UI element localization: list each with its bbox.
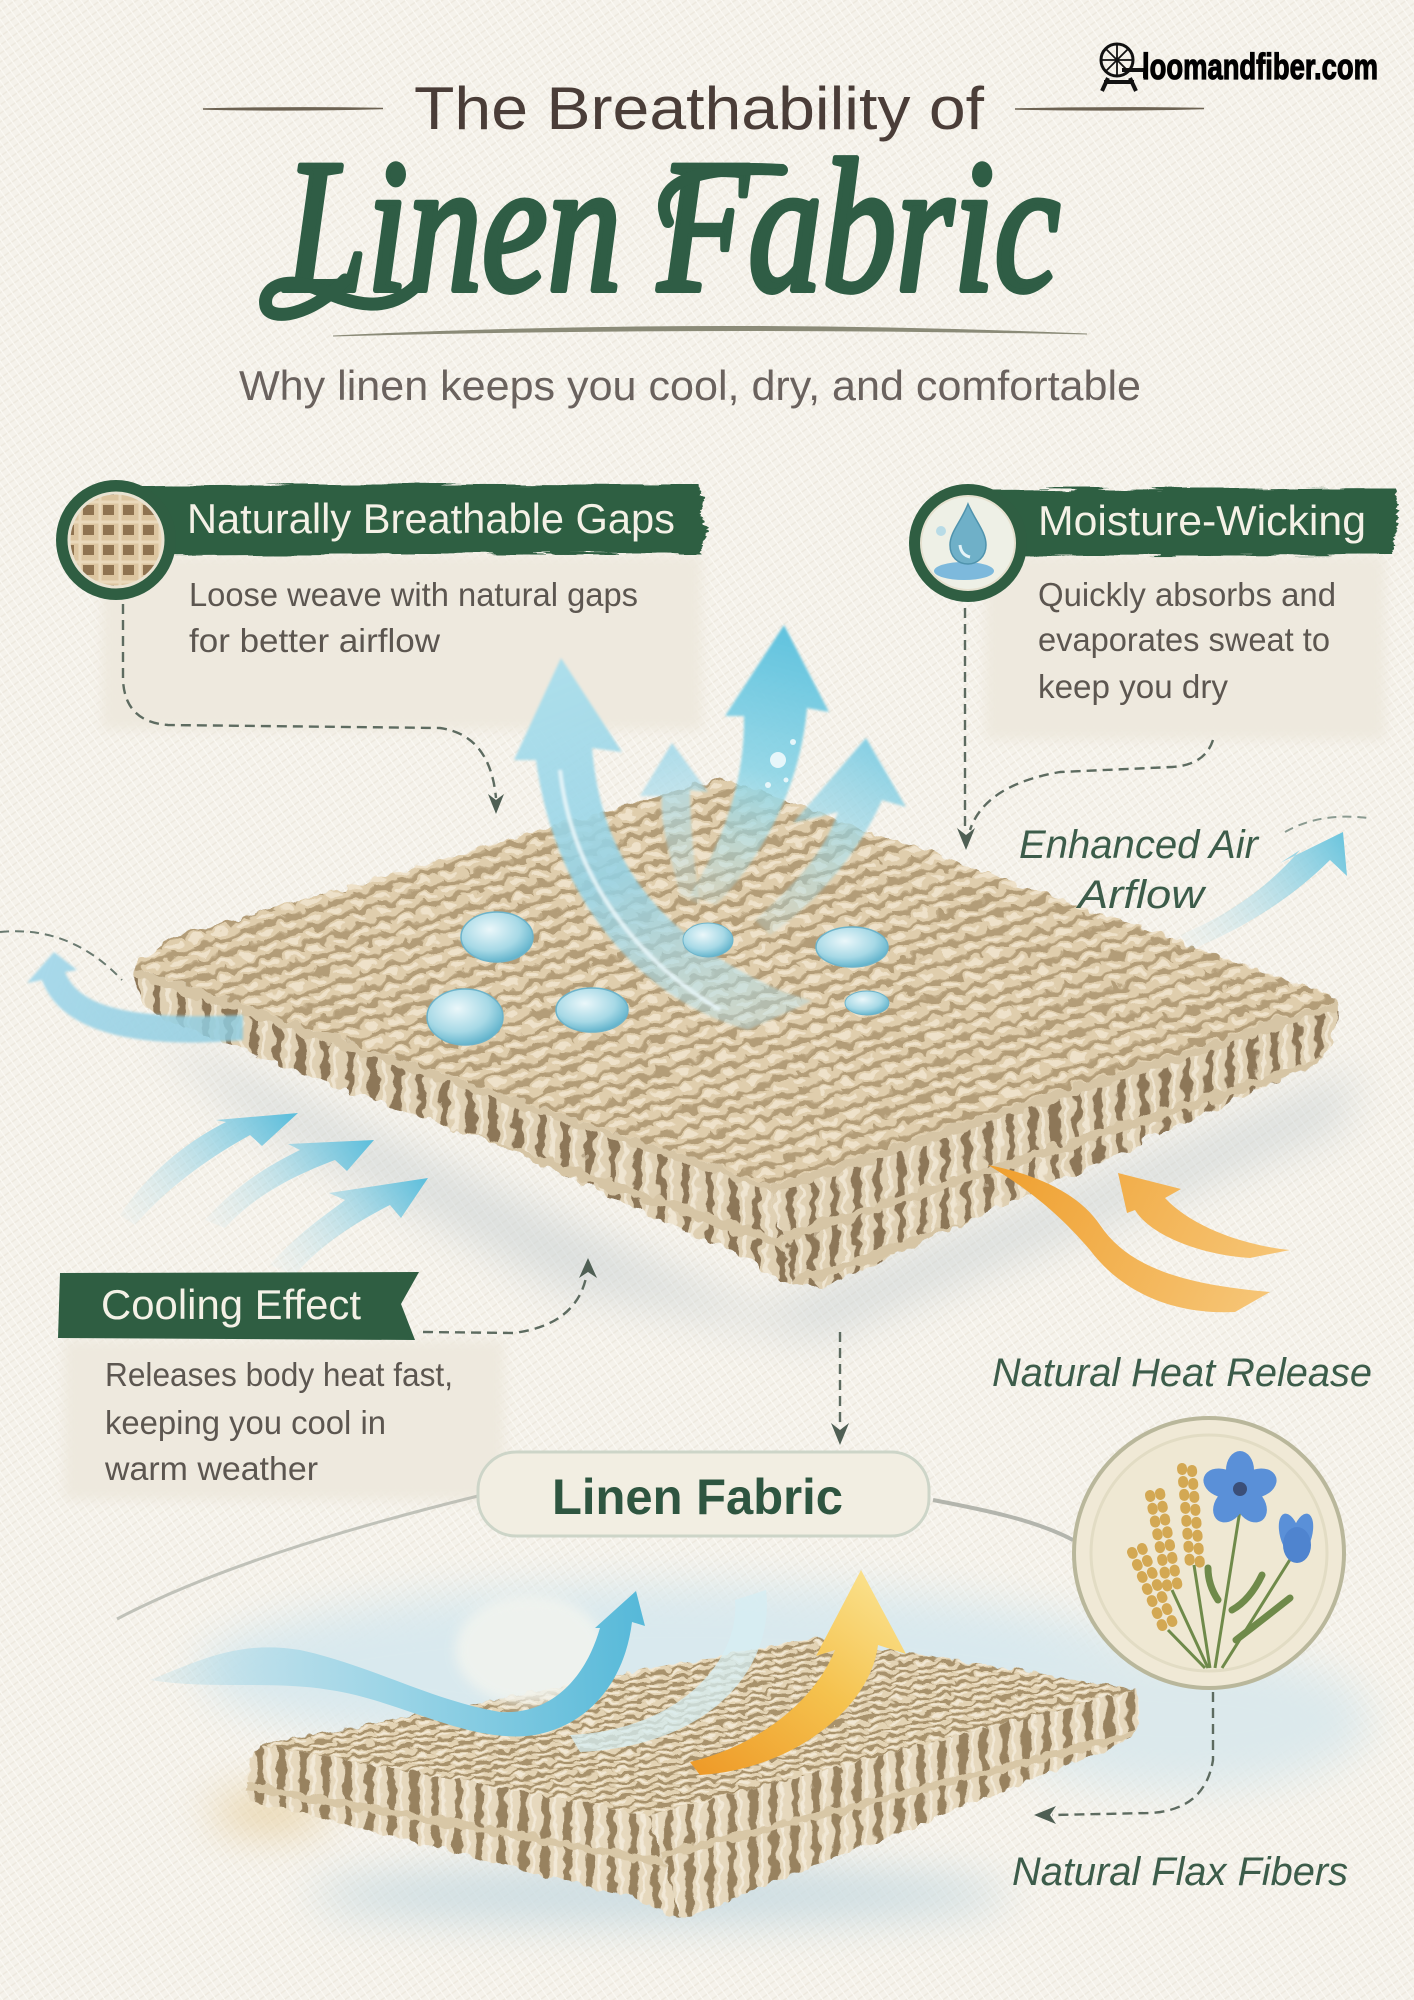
label: natural heat release: Natural Heat Release (992, 1351, 1372, 1395)
icon: water drop (909, 484, 1027, 602)
dashed flow line: left curl (0, 931, 122, 980)
panel: cooling effect: keeping you cool in (105, 1404, 386, 1441)
pill: linen fabric (478, 1452, 929, 1536)
airflow arrow: small rear (640, 743, 708, 905)
stems and leaves (1168, 1510, 1296, 1668)
airflow arrow: large curved (514, 658, 812, 1030)
airflow arrow: right exit (1180, 832, 1347, 950)
heading: Cooling Effect (101, 1281, 361, 1328)
lower linen swatch (246, 1638, 1140, 1917)
panel: moisture-wicking: keep you dry (1038, 668, 1228, 705)
panel: moisture-wicking: evaporates sweat to (1038, 621, 1330, 658)
logo: loomandfiber.com (1101, 44, 1378, 91)
panel backing (102, 555, 702, 730)
main linen swatch (133, 778, 1338, 1287)
title: Linen Fabric script: Linen Fabric (283, 122, 1060, 332)
description: Loose weave with natural gaps (189, 576, 638, 613)
top woven surface (135, 778, 1338, 1185)
subtitle: Why linen keeps you cool, dry, and comfortable (239, 362, 1141, 409)
fabric shadow (150, 1030, 1360, 1340)
panel: naturally breathable gaps: for better airflow (189, 622, 440, 659)
flax flowers (1200, 1451, 1317, 1563)
lower yellow heat arrow (690, 1570, 906, 1775)
dashed connector: fabric to linen fabric pill (831, 1332, 849, 1445)
heading: Naturally Breathable Gaps (187, 495, 675, 542)
left side face (133, 968, 792, 1282)
header banner (120, 484, 708, 556)
pill: linen fabric: Linen Fabric (552, 1469, 843, 1525)
label: enhanced air airflow (1019, 817, 1368, 917)
panel backing (64, 1340, 504, 1500)
header banner (975, 488, 1398, 556)
heat arrows: orange (988, 1165, 1290, 1312)
panel: moisture-wicking (909, 484, 1398, 740)
mist cloud over lower swatch (455, 1595, 605, 1705)
cooling arrows: lower left (120, 1113, 428, 1275)
panel: naturally breathable gaps (56, 480, 708, 730)
dashed connector: cooling effect to fabric (423, 1258, 597, 1333)
label: natural flax fibers: Natural Flax Fibers (1012, 1850, 1348, 1894)
description: Releases body heat fast, (105, 1356, 453, 1393)
wheat stalks (1132, 1468, 1200, 1630)
panel backing (985, 555, 1385, 740)
airflow arrow: right rising (755, 738, 906, 935)
label: enhanced air airflow: Enhanced Air (1019, 823, 1260, 867)
title: The Breathability of: The Breathability of (414, 75, 984, 142)
dashed connector: medallion to lower swatch (1034, 1692, 1213, 1824)
connector arcs to pill (117, 1496, 1073, 1619)
right side face (770, 1000, 1338, 1287)
panel: cooling effect (58, 1272, 504, 1500)
panel: cooling effect: warm weather (104, 1450, 318, 1487)
right side face (649, 1689, 1140, 1917)
label: enhanced air airflow: Arflow (1076, 873, 1208, 917)
water droplets (427, 912, 889, 1045)
heading: Moisture-Wicking (1038, 497, 1366, 544)
title block (203, 75, 1204, 409)
lower blue arrow (150, 1591, 645, 1736)
header banner (58, 1272, 419, 1340)
dashed connector: moisture-wicking to fabric (957, 608, 1213, 850)
left side face (246, 1745, 680, 1917)
flax medallion (1074, 1418, 1344, 1688)
airflow arrow: tall centre (690, 625, 829, 905)
description: Quickly absorbs and (1038, 576, 1336, 613)
lower light swoosh (570, 1590, 767, 1752)
icon: weave swatch (56, 480, 176, 600)
icon: spinning wheel (1101, 44, 1145, 91)
airflow arrow: left curl (27, 952, 243, 1042)
dashed connector: breathable gaps to fabric (123, 604, 504, 814)
top woven surface (261, 1638, 1136, 1815)
watercolor wash behind lower swatch (200, 1585, 1370, 1925)
